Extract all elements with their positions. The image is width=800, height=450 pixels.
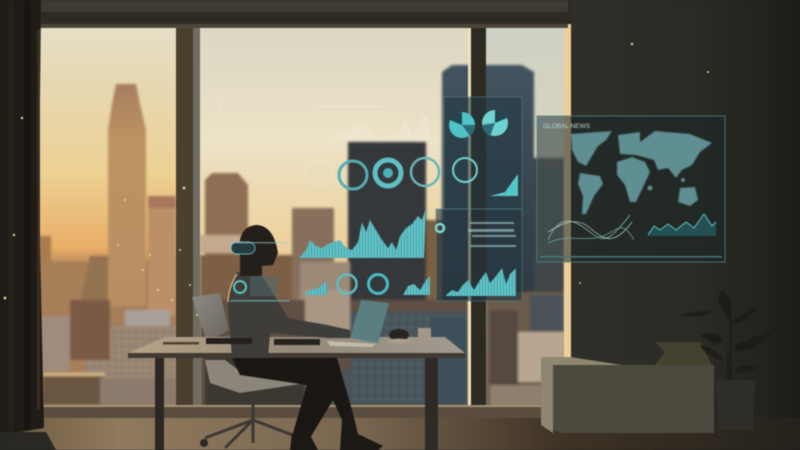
world map — [571, 131, 712, 214]
curtain — [0, 0, 44, 432]
chair back — [192, 293, 229, 342]
line chart left — [548, 215, 634, 243]
building: distant block — [148, 196, 176, 316]
main teal bar chart — [299, 208, 426, 258]
pie chart left — [449, 112, 475, 138]
right wall — [565, 0, 800, 450]
area chart — [490, 174, 518, 196]
window frame mullions — [40, 24, 571, 408]
wall map panel — [537, 116, 725, 262]
shoes — [290, 410, 383, 450]
right window pane with tower — [442, 28, 564, 408]
notebook — [274, 339, 320, 345]
person silhouette — [228, 225, 383, 450]
laptop and desk items — [163, 300, 431, 347]
sunset rim light — [228, 274, 237, 302]
torso and arm — [228, 272, 350, 358]
hologram panel: lower dashboard — [436, 209, 522, 301]
hologram on torso — [230, 242, 290, 302]
hologram panel: tall tower dashboard — [444, 97, 522, 209]
headset readout — [231, 242, 255, 254]
bag — [206, 338, 252, 344]
small bar chart right — [403, 276, 430, 295]
keys — [163, 342, 199, 344]
data dot rows — [468, 222, 516, 247]
ring gauge — [453, 158, 477, 182]
panel heading: GLOBAL NEWS — [543, 123, 591, 130]
chair base — [205, 393, 295, 448]
faint bar chart in sky — [326, 114, 432, 140]
legs — [232, 358, 352, 438]
faint sky panels — [220, 98, 386, 115]
mouse object — [389, 329, 409, 341]
bench — [541, 357, 714, 433]
ring gauge right — [368, 274, 388, 294]
head — [240, 225, 278, 276]
lower small charts — [303, 274, 430, 295]
hologram ring row — [306, 158, 439, 189]
chair — [192, 293, 307, 448]
laptop — [350, 300, 389, 343]
plant — [680, 290, 777, 430]
ottoman shadow at floor left — [0, 432, 56, 450]
floating light particles — [4, 43, 709, 316]
small bar chart left — [303, 281, 327, 295]
building: tall tower — [108, 84, 146, 306]
bar chart — [446, 268, 516, 296]
window sill — [42, 405, 564, 418]
book stack on bench — [655, 342, 712, 365]
line chart right — [648, 214, 716, 236]
centre window pane with skyline — [200, 28, 468, 408]
left window pane with skyline — [38, 28, 176, 408]
small donut — [436, 224, 444, 232]
ceiling — [0, 0, 572, 28]
pie chart right — [482, 110, 508, 136]
desk — [128, 337, 465, 450]
floor — [0, 418, 800, 450]
ring gauge left — [338, 274, 356, 294]
chair seat — [205, 360, 307, 393]
panel footer — [540, 256, 722, 258]
coffee cup — [418, 328, 431, 346]
